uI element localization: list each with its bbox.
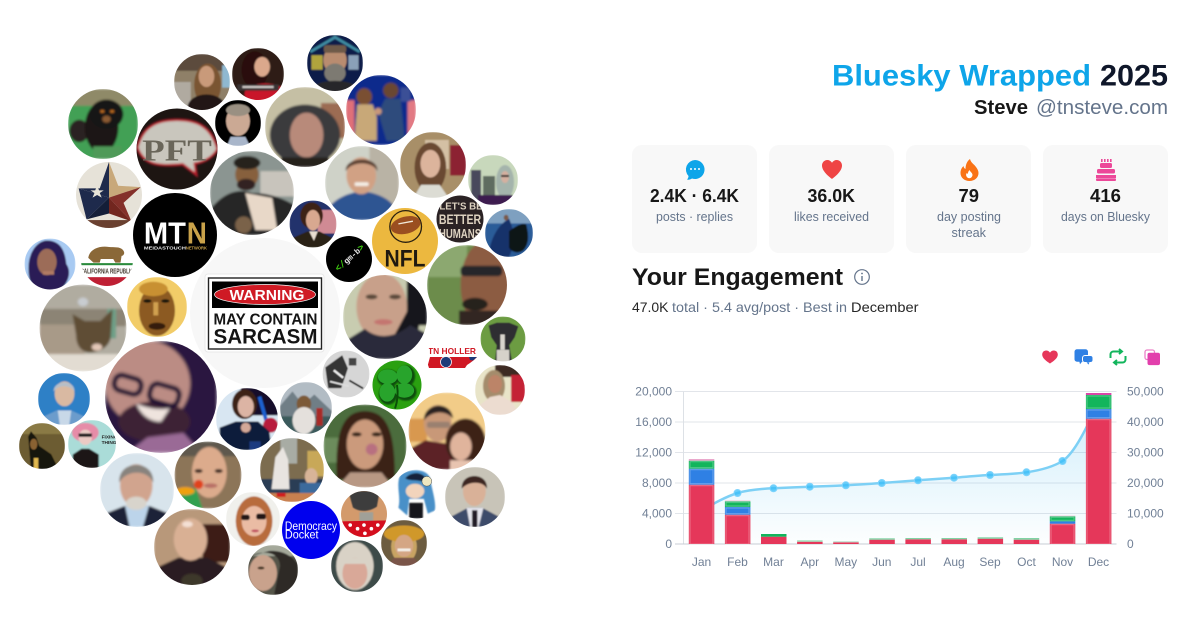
avatar: warning sign, largest bubble: WARNING [230,287,304,304]
left y axis labels: 12,000 [635,446,672,460]
right y axis labels: 50,000 [1127,384,1164,398]
avatar: PFT logo: PFT [142,133,212,167]
month labels: Nov [1052,555,1073,569]
avatar: gothic woman with castle [468,155,518,205]
avatar: warning sign, largest bubble: MAY CONTAIN [214,311,318,328]
panel: days on Bluesky stat: days on Bluesky [1061,209,1150,224]
avatar: woman with flag backdrop [290,200,336,248]
avatar: TN Holler logo [428,348,477,368]
avatar: NFL football logo [372,208,438,274]
avatar: bald man with dark shirt [154,509,230,587]
left y axis labels: 0 [665,537,672,551]
avatar: bearded man with purple glasses [105,341,217,453]
icon: heart [822,160,842,179]
avatar: better humans text: HUMANS [439,226,481,241]
avatar: pink haired cartoon: THINGS [102,440,121,446]
month labels: Jun [872,555,891,569]
avatar: warning sign, largest bubble: SARCASM [214,325,318,348]
month labels: Feb [727,555,748,569]
month labels: Jul [910,555,926,569]
title: 2025 [1100,60,1168,92]
icon: birthday cake [1096,159,1116,181]
avatar: cartoon girl with blue hair [392,470,442,518]
avatar: woman in restaurant [174,54,230,110]
avatar: pink haired cartoon [68,420,121,468]
left y axis labels: 16,000 [635,415,672,429]
icon: quotes legend [1145,350,1160,365]
month labels: Sep [979,555,1001,569]
month labels: Aug [943,555,965,569]
right y axis labels: 10,000 [1127,506,1164,520]
icon: chat bubble [686,160,705,180]
icon: reposts legend [1110,349,1126,365]
panel: day posting streak stat: day posting [937,209,1001,224]
chart: monthly engagement [635,384,1164,569]
icon: replies legend [1074,349,1093,365]
left y axis labels [635,384,672,551]
user name and handle [974,97,1168,119]
avatar: Democracy Docket logo [282,501,340,559]
engagement summary: 47.0K [632,299,669,315]
avatar: man on blue background [38,373,90,425]
avatar: MTN logo: MT [144,217,186,250]
avatar: MTN logo [133,193,217,277]
grid lines [675,392,1116,544]
cumulative area [702,401,1099,544]
user name and handle: Steve [974,97,1028,119]
avatar: cartoon redhead with glasses [226,492,280,546]
panel: posts and replies stat [632,145,757,253]
avatar: black and white sketch [322,350,370,398]
avatar: pink haired cartoon: FIXING [102,434,118,440]
panel: likes received stat [769,145,894,253]
avatar: California republic flag [81,246,133,286]
panel: likes received stat: 36.0K [808,186,855,206]
avatar: PFT logo [136,108,218,190]
avatar: warning sign, largest bubble [190,238,340,388]
avatar: woman in yellow hat [381,520,427,566]
avatar: cat in sink [40,284,126,372]
avatar: marmot in shirt [280,382,332,434]
avatar: couple selfie [408,392,486,470]
avatar: woman with dark curly hair [265,87,345,167]
icon: likes legend [1042,350,1058,364]
avatar: gm-b code logo: </gm-b> [333,242,367,274]
right y axis labels: 40,000 [1127,415,1164,429]
avatar: woman sticking out tongue [324,404,406,488]
avatar: woman with white hair [331,540,383,592]
avatar: woman with curly hair and flower [174,442,242,508]
avatar: news anchor in red [232,48,284,100]
panel: posts and replies stat: 2.4K · 6.4K [650,186,739,206]
right y axis labels: 0 [1127,537,1134,551]
avatar: better humans text: LET'S BE [439,202,483,213]
avatar: better humans text [436,196,484,242]
avatar: statue in museum [260,438,324,502]
avatar: woman with red phone [475,365,525,415]
right y axis labels [1127,384,1164,551]
month labels [692,555,1109,569]
stacked monthly bars [689,393,1111,544]
month labels: Mar [763,555,784,569]
avatar: boxer dog on grass [480,316,526,362]
month labels: Dec [1088,555,1109,569]
avatar: older man in suit [100,453,174,527]
avatar: polka dot outfit [341,491,387,539]
title: Bluesky Wrapped [832,60,1091,92]
avatar: golden portrait face [127,277,187,337]
avatar: woman with black horse [485,209,533,257]
engagement summary: total · 5.4 avg/post · Best in [672,299,847,315]
panel: days on Bluesky stat: 416 [1090,186,1121,206]
left y axis labels: 4,000 [642,506,672,520]
avatar: MTN logo: NETWORK [186,245,207,250]
panel: day posting streak stat [906,145,1031,253]
month labels: Apr [800,555,819,569]
user name and handle: @tnsteve.com [1036,97,1168,119]
month labels: Oct [1017,555,1036,569]
avatar: man with sunglasses [427,242,509,328]
avatar: black spaniel dog [68,89,138,159]
avatar: Texas star [76,162,142,228]
avatar: smiling grey haired man [215,100,261,146]
panel: avatar bubble cluster [19,35,533,595]
right y axis labels: 30,000 [1127,446,1164,460]
cumulative points [734,458,1066,496]
avatar: man with cap and beard [307,35,363,91]
month labels: Jan [692,555,711,569]
avatar: woman with dark hair and green eyes [343,273,427,359]
panel: day posting streak stat: 79 [958,186,979,206]
avatar: TV host in black [216,388,278,450]
engagement summary: December [851,299,919,315]
panel: likes received stat: likes received [794,209,869,224]
avatar: Democracy Docket logo: Democracy [285,520,337,533]
avatar: woman close up [248,545,298,595]
panel: posts and replies stat: posts · replies [656,209,733,224]
avatar: Democracy Docket logo: Docket [285,529,319,542]
avatar: smiling man in blue polo [325,146,399,220]
avatar: MTN logo: MEIDASTOUCH [144,245,187,250]
avatar: TN Holler logo: TN HOLLER [428,347,476,356]
avatar: woman with long brown hair [400,132,466,198]
avatar: handshake with flags [346,75,416,145]
right y axis labels: 20,000 [1127,476,1164,490]
avatar: better humans text: BETTER [439,211,481,227]
icon: info [855,270,869,284]
month labels: May [834,555,857,569]
chart legend icons [1042,349,1160,365]
avatar: young man in suit [445,467,505,527]
avatar: green four leaf clover [372,360,422,410]
avatar: german shepherd dog [19,423,65,469]
engagement summary [632,299,919,315]
avatar: woman with purple hair [24,238,76,291]
left y axis labels: 8,000 [642,476,672,490]
avatar: gm-b code logo [326,236,372,282]
heading: your engagement: Your Engagement [632,264,843,291]
icon: flame [960,159,978,181]
avatar: California republic flag: CALIFORNIA REPUBLIC [80,267,134,276]
cumulative line [702,401,1099,510]
avatar: MTN logo: N [187,217,207,250]
avatar: man with black jacket and cat [210,151,294,235]
panel: days on Bluesky stat [1043,145,1168,253]
left y axis labels: 20,000 [635,384,672,398]
panel: day posting streak stat: streak [952,225,986,240]
avatar: NFL football logo: NFL [385,246,425,273]
